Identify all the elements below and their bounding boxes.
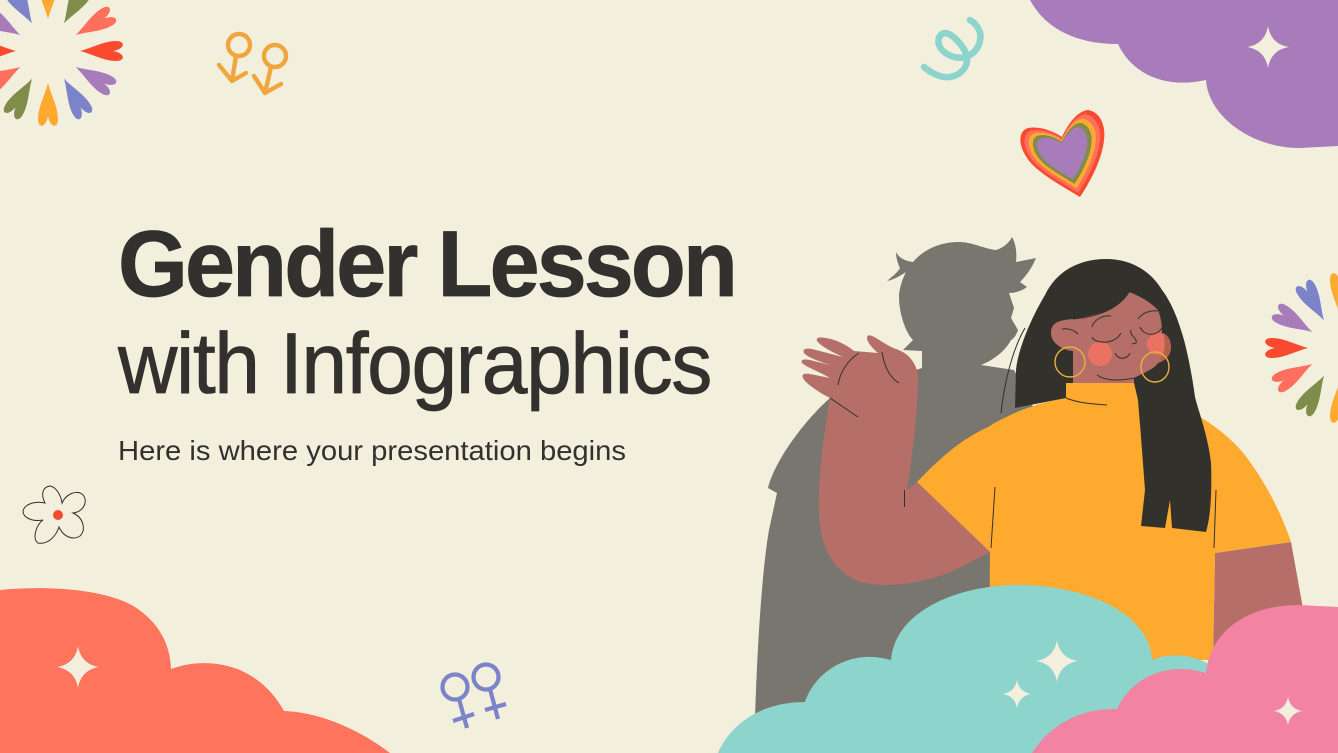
- title: [117, 211, 735, 412]
- title: with Infographics: [117, 316, 711, 412]
- icon: orange male symbols: [219, 34, 286, 93]
- icon: flower: [23, 486, 85, 543]
- person: shirt: [917, 383, 1291, 660]
- icon: sunburst right edge: [1265, 273, 1338, 423]
- subtitle: Here is where your presentation begins: [118, 435, 626, 466]
- cloud: purple top right: [1030, 0, 1338, 148]
- icon: rainbow heart: [1020, 110, 1104, 197]
- illustration: two people: [755, 237, 1310, 720]
- cloud: pink bottom right: [1032, 605, 1338, 753]
- person: line details: [830, 292, 1216, 548]
- person: shadow silhouette: [755, 237, 1040, 720]
- person: waving arm and hand: [802, 335, 990, 585]
- icon: sunburst top left: [0, 0, 123, 126]
- person: hair back: [1015, 259, 1211, 532]
- person: right arm: [1213, 542, 1310, 660]
- cloud: coral bottom left: [0, 588, 390, 753]
- icon: teal swirl: [924, 20, 980, 77]
- cloud: teal bottom: [718, 585, 1210, 753]
- title: Gender Lesson: [118, 211, 735, 316]
- person: face: [1051, 292, 1171, 386]
- person: collar: [1066, 383, 1134, 398]
- icon: blue female symbols: [442, 664, 506, 728]
- person: cheeks: [1088, 333, 1171, 366]
- person: earrings: [1055, 347, 1169, 382]
